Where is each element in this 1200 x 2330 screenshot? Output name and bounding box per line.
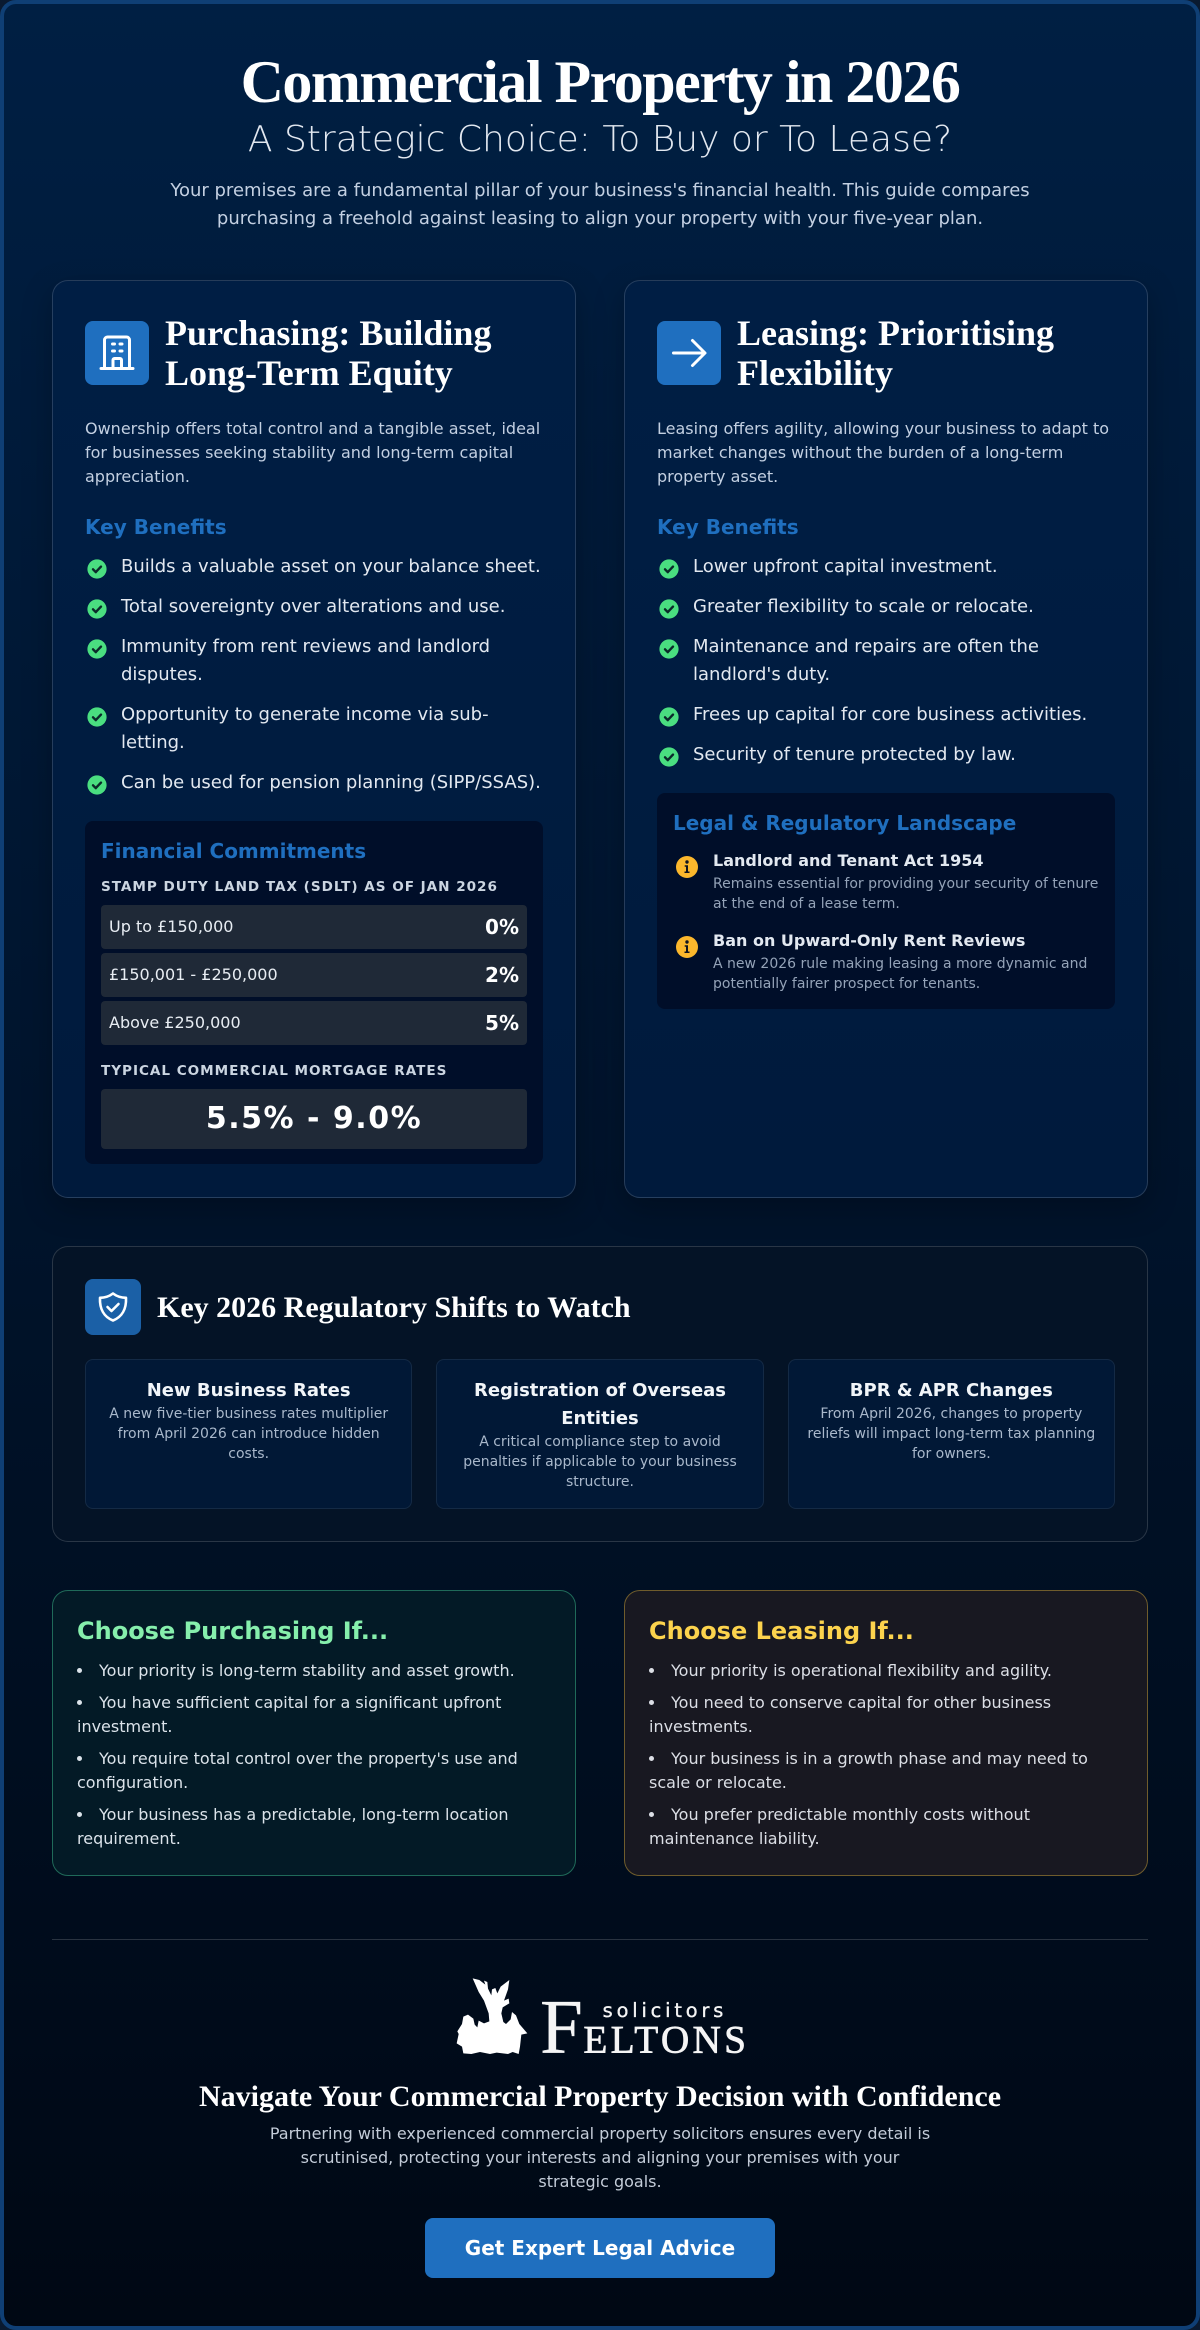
tax band 2: 2% bbox=[485, 963, 519, 987]
mortgage rate value: 5.5% - 9.0% bbox=[206, 1101, 422, 1136]
card title bbox=[474, 1380, 726, 1428]
checklist: Your priority is operational flexibility and agility. bbox=[671, 1661, 1052, 1680]
subheading: key benefits: Key Benefits bbox=[85, 515, 227, 539]
card text bbox=[463, 1434, 737, 1490]
panel: legal and regulatory landscape bbox=[657, 793, 1115, 1009]
tax band 2 bbox=[101, 953, 527, 997]
benefits list bbox=[87, 556, 541, 795]
card text: costs. bbox=[228, 1446, 269, 1462]
icon: info bbox=[676, 936, 698, 958]
subheading: key benefits: Key Benefits bbox=[657, 515, 799, 539]
description: for businesses seeking stability and long-term capital bbox=[85, 443, 513, 462]
panel heading bbox=[165, 313, 492, 393]
item text: rent reviews ban: potentially fairer prospect for tenants. bbox=[713, 976, 980, 992]
panel: choose leasing bbox=[624, 1590, 1148, 1876]
card text: A new five-tier business rates multiplier bbox=[109, 1406, 388, 1422]
checklist: You require total control over the property's use and configuration. bbox=[77, 1749, 518, 1792]
panel heading: Flexibility bbox=[737, 353, 893, 393]
button bbox=[425, 2218, 775, 2278]
card text bbox=[807, 1406, 1095, 1462]
intro paragraph bbox=[170, 180, 1030, 229]
cta heading: Navigate Your Commercial Property Decision with Confidence bbox=[199, 2080, 1001, 2112]
card title: BPR & APR Changes bbox=[850, 1380, 1053, 1400]
card text: structure. bbox=[566, 1474, 634, 1490]
benefit 4 bbox=[87, 704, 489, 753]
panel heading: Long-Term Equity bbox=[165, 353, 453, 393]
benefit 1: Lower upfront capital investment. bbox=[693, 556, 998, 577]
benefit 5: Can be used for pension planning (SIPP/SSAS). bbox=[121, 772, 541, 793]
logo wordmark: F bbox=[540, 1983, 583, 2069]
benefit 3: Maintenance and repairs are often the bbox=[693, 636, 1039, 657]
benefit 1: Builds a valuable asset on your balance sheet. bbox=[121, 556, 541, 577]
card: overseas entities bbox=[436, 1359, 764, 1509]
card title: Registration of Overseas bbox=[474, 1380, 726, 1400]
title: Commercial Property in 2026 bbox=[241, 48, 959, 114]
benefits list bbox=[659, 556, 1087, 767]
intro paragraph: Your premises are a fundamental pillar of your business's financial health. This guide compares bbox=[170, 180, 1030, 201]
cta text bbox=[270, 2124, 930, 2190]
tax band 3: 5% bbox=[485, 1011, 519, 1035]
checklist: You need to conserve capital for other business investments. bbox=[649, 1693, 1051, 1736]
logo wordmark: ELTONS bbox=[583, 2017, 746, 2061]
item text: landlord and tenant act: Landlord and Tenant Act 1954 bbox=[713, 851, 984, 870]
logo wordmark bbox=[540, 1983, 746, 2069]
header bbox=[170, 48, 1030, 229]
subtitle: A Strategic Choice: To Buy or To Lease? bbox=[248, 119, 952, 160]
logo: feltons solicitors bbox=[456, 1978, 746, 2069]
item text: landlord and tenant act: at the end of a lease term. bbox=[713, 896, 900, 912]
benefit 3 bbox=[87, 636, 490, 685]
subheading: financial commitments: Financial Commitments bbox=[101, 839, 366, 863]
benefit 5: Security of tenure protected by law. bbox=[693, 744, 1016, 765]
panel: financial commitments bbox=[85, 821, 543, 1164]
card title: New Business Rates bbox=[147, 1380, 351, 1400]
benefit 3: Immunity from rent reviews and landlord bbox=[121, 636, 490, 657]
panel heading bbox=[737, 313, 1054, 393]
subheading: legal landscape: Legal & Regulatory Landscape bbox=[673, 811, 1016, 835]
benefit 3: disputes. bbox=[121, 664, 203, 685]
tax band 2: £150,001 - £250,000 bbox=[109, 964, 278, 984]
heading: Choose Leasing If... bbox=[649, 1616, 914, 1644]
tax band 3: Above £250,000 bbox=[109, 1012, 241, 1032]
cta text: strategic goals. bbox=[538, 2172, 662, 2190]
item text: landlord and tenant act bbox=[713, 851, 1098, 912]
description: appreciation. bbox=[85, 467, 190, 486]
icon: info bbox=[676, 856, 698, 878]
benefit 4: letting. bbox=[121, 732, 185, 753]
logo wordmark: solicitors bbox=[603, 1999, 723, 2022]
checklist: Your business is in a growth phase and may need to scale or relocate. bbox=[649, 1749, 1088, 1792]
heading: Choose Purchasing If... bbox=[77, 1616, 388, 1644]
icon: building bbox=[85, 321, 149, 385]
checklist: You have sufficient capital for a significant upfront investment. bbox=[77, 1693, 501, 1736]
benefit 2: Greater flexibility to scale or relocate. bbox=[693, 596, 1034, 617]
panel: regulatory shifts bbox=[52, 1246, 1148, 1542]
card text: A critical compliance step to avoid bbox=[479, 1434, 721, 1450]
call to action bbox=[199, 2080, 1001, 2278]
description bbox=[85, 419, 540, 486]
card title: Entities bbox=[561, 1408, 639, 1428]
tax band 1 bbox=[101, 905, 527, 949]
section heading: Key 2026 Regulatory Shifts to Watch bbox=[157, 1291, 631, 1324]
card text: penalties if applicable to your business bbox=[463, 1454, 737, 1470]
panel: leasing bbox=[624, 280, 1148, 1198]
benefit 4: Frees up capital for core business activities. bbox=[693, 704, 1087, 725]
item text: rent reviews ban bbox=[713, 931, 1087, 992]
description: Leasing offers agility, allowing your business to adapt to bbox=[657, 419, 1109, 438]
icon: arrow bbox=[657, 321, 721, 385]
cta text: Partnering with experienced commercial property solicitors ensures every detail is bbox=[270, 2124, 930, 2142]
checklist: You prefer predictable monthly costs without maintenance liability. bbox=[649, 1805, 1030, 1848]
benefit 4: Opportunity to generate income via sub- bbox=[121, 704, 489, 725]
label: sdlt: STAMP DUTY LAND TAX (SDLT) AS OF JAN 2026 bbox=[101, 879, 498, 895]
card text: From April 2026, changes to property bbox=[820, 1406, 1082, 1422]
card text bbox=[109, 1406, 388, 1462]
description: property asset. bbox=[657, 467, 778, 486]
panel: purchasing bbox=[52, 280, 576, 1198]
card text: from April 2026 can introduce hidden bbox=[118, 1426, 380, 1442]
description bbox=[657, 419, 1109, 486]
item text: rent reviews ban: Ban on Upward-Only Rent Reviews bbox=[713, 931, 1025, 950]
card text: reliefs will impact long-term tax planning bbox=[807, 1426, 1095, 1442]
tax band 3 bbox=[101, 1001, 527, 1045]
card: new business rates bbox=[85, 1359, 412, 1509]
tax band 1: 0% bbox=[485, 915, 519, 939]
benefit 3 bbox=[659, 636, 1039, 685]
label: mortgage rates: TYPICAL COMMERCIAL MORTGAGE RATES bbox=[101, 1063, 447, 1079]
cta text: scrutinised, protecting your interests and aligning your premises with your bbox=[301, 2148, 899, 2166]
description: Ownership offers total control and a tangible asset, ideal bbox=[85, 419, 540, 438]
panel heading: Leasing: Prioritising bbox=[737, 313, 1054, 353]
checklist: Your priority is long-term stability and asset growth. bbox=[99, 1661, 515, 1680]
tax band 1: Up to £150,000 bbox=[109, 916, 233, 936]
benefit 3: landlord's duty. bbox=[693, 664, 830, 685]
panel: choose purchasing bbox=[52, 1590, 576, 1876]
legal item: rent reviews ban bbox=[676, 931, 1087, 992]
panel heading: Purchasing: Building bbox=[165, 313, 491, 353]
item text: rent reviews ban: A new 2026 rule making leasing a more dynamic and bbox=[713, 956, 1087, 972]
legal item: landlord and tenant act bbox=[676, 851, 1098, 912]
mortgage rate value bbox=[101, 1089, 527, 1149]
card: bpr and apr bbox=[788, 1359, 1115, 1509]
item text: landlord and tenant act: Remains essential for providing your security of tenure bbox=[713, 876, 1098, 892]
icon: shield bbox=[85, 1279, 141, 1335]
checklist bbox=[649, 1661, 1088, 1848]
checklist: Your business has a predictable, long-term location requirement. bbox=[77, 1805, 509, 1848]
button: Get Expert Legal Advice bbox=[465, 2236, 735, 2260]
card text: for owners. bbox=[912, 1446, 991, 1462]
checklist bbox=[77, 1661, 518, 1848]
intro paragraph: purchasing a freehold against leasing to align your property with your five-year plan. bbox=[217, 208, 983, 229]
logo emblem bbox=[457, 1978, 527, 2054]
description: market changes without the burden of a long-term bbox=[657, 443, 1063, 462]
benefit 2: Total sovereignty over alterations and use. bbox=[121, 596, 505, 617]
